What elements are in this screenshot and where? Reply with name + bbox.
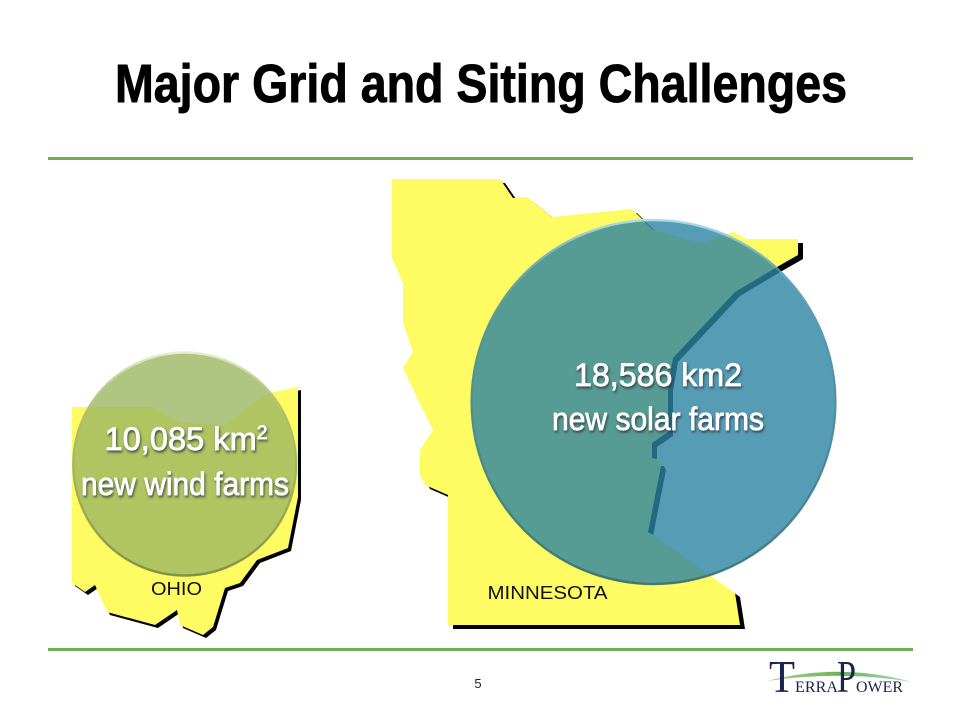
title: Major Grid and Siting Challenges xyxy=(115,54,847,114)
solar farm label xyxy=(552,357,764,437)
wind farm label: new wind farms xyxy=(81,466,289,502)
page number: 5 xyxy=(474,676,482,691)
wind farm label: 10,085 km xyxy=(104,421,254,457)
bottom divider xyxy=(48,648,913,651)
label: Minnesota: MINNESOTA xyxy=(488,582,608,603)
circle: wind farm area xyxy=(72,352,297,576)
wind farm label: 2 xyxy=(257,423,267,444)
circle: solar farm area xyxy=(470,219,836,585)
logo: TerraPower: P xyxy=(837,651,856,702)
label: Ohio: OHIO xyxy=(151,578,202,599)
map: Ohio xyxy=(72,387,301,638)
solar farm label: 18,586 km2 xyxy=(574,357,742,393)
wind farm label xyxy=(81,421,289,502)
logo: TerraPower: ERRA xyxy=(795,679,839,696)
solar farm label: new solar farms xyxy=(552,401,764,437)
logo: TerraPower: T xyxy=(769,651,795,702)
logo: TerraPower xyxy=(767,651,912,702)
top divider xyxy=(48,157,913,160)
logo: TerraPower: OWER xyxy=(856,679,904,696)
map: Minnesota xyxy=(392,179,803,629)
